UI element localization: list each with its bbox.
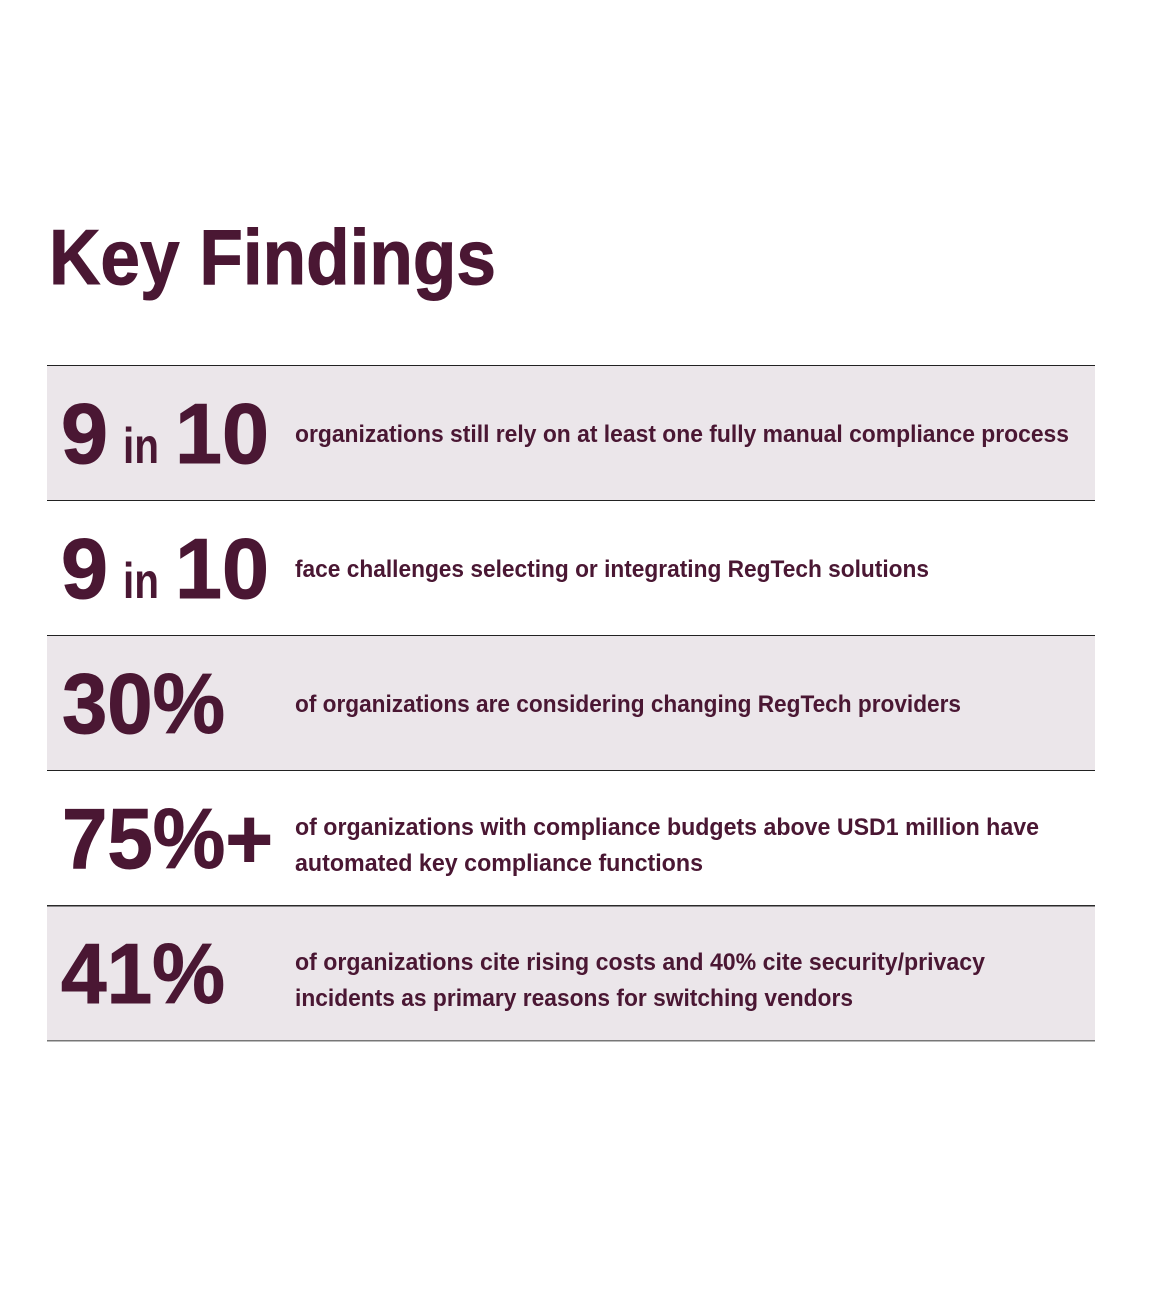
description: of organizations are considering changing RegTech providers (295, 691, 961, 718)
panel: row 4 (47, 770, 1095, 887)
statistic: 41%: 41% (61, 927, 225, 1022)
description (295, 949, 985, 1012)
description: incidents as primary reasons for switching vendors (295, 985, 853, 1012)
panel: row 3 (47, 635, 1095, 770)
statistic: 9 in 10: 10 (175, 522, 269, 617)
panel: row 1 (47, 365, 1095, 500)
statistic: 9 in 10: 10 (175, 387, 269, 482)
statistic: 9 in 10: 9 (61, 387, 108, 482)
statistic: 30%: 30% (62, 657, 225, 752)
description: organizations still rely on at least one fully manual compliance process (295, 421, 1069, 448)
statistic: 9 in 10: in (123, 553, 159, 609)
statistic: 75%+: 75%+ (62, 792, 273, 887)
panel: row 2 (47, 500, 1095, 617)
title: Key Findings (49, 213, 496, 301)
description: of organizations cite rising costs and 40% cite security/privacy (295, 949, 985, 976)
statistic: 9 in 10 (61, 522, 269, 617)
panel: row 5 (47, 905, 1095, 1042)
statistic: 9 in 10 (61, 387, 269, 482)
description (295, 814, 1039, 877)
description: automated key compliance functions (295, 850, 703, 877)
statistic: 9 in 10: 9 (61, 522, 108, 617)
statistic: 9 in 10: in (123, 418, 159, 474)
description: face challenges selecting or integrating RegTech solutions (295, 556, 929, 583)
description: of organizations with compliance budgets above USD1 million have (295, 814, 1039, 841)
